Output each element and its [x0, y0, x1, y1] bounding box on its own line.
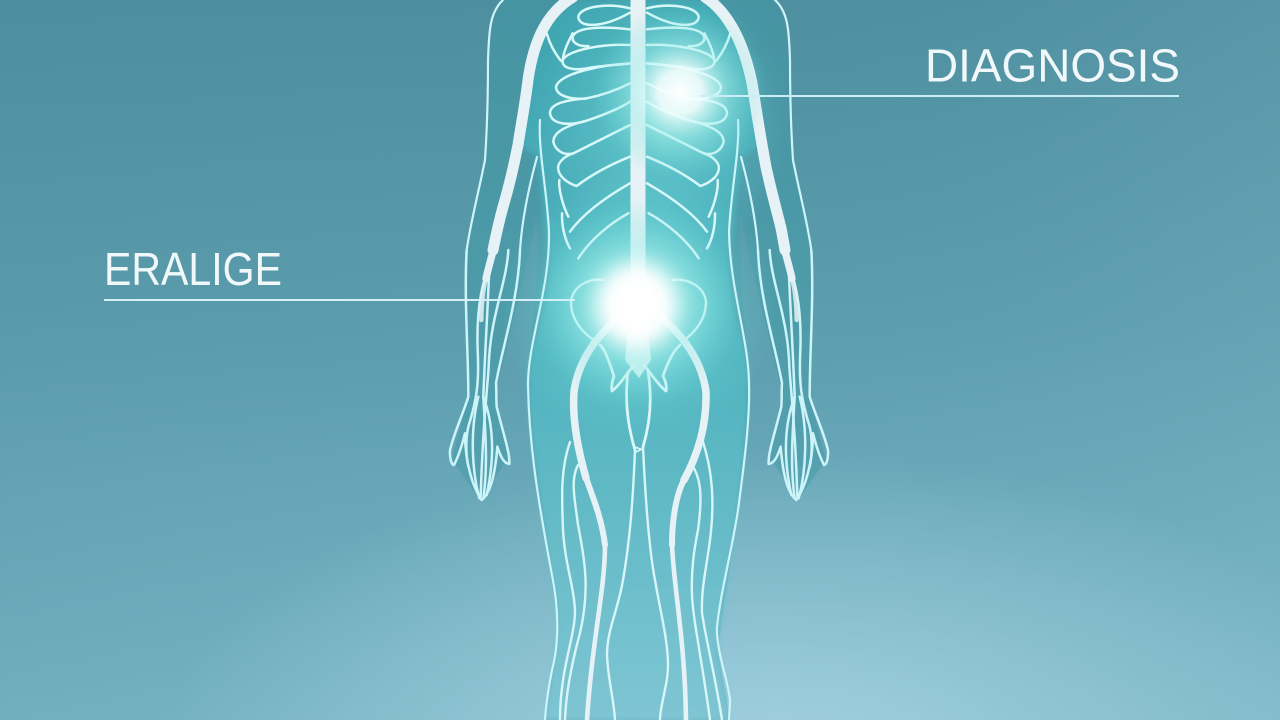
- leg outlines: thin: [560, 442, 722, 720]
- ribs: right side: [647, 6, 730, 258]
- central torso glow: [498, 0, 790, 440]
- right arm and hand: [758, 250, 828, 500]
- callout: DIAGNOSIS: DIAGNOSIS: [925, 40, 1180, 92]
- leg nerves: narrower lower: [587, 545, 686, 720]
- ribs: left side: [547, 6, 630, 258]
- callout: ERALIGE: ERALIGE: [104, 243, 282, 295]
- glow: chest: [592, 4, 768, 180]
- body outline: right side: [717, 0, 811, 720]
- shoulder to arm nerves: [493, 0, 785, 250]
- body outline: left side: [467, 0, 557, 720]
- body silhouette fill: [452, 0, 826, 720]
- leg nerves: tapering middle: [586, 478, 684, 545]
- left arm and hand: [450, 250, 520, 500]
- spine: [630, 0, 646, 300]
- groin and pelvic details: [600, 345, 680, 452]
- leg nerves: thick upper: [574, 318, 706, 480]
- glow: pelvis: [532, 200, 742, 410]
- pelvis: heart-shaped outlines: [571, 280, 706, 340]
